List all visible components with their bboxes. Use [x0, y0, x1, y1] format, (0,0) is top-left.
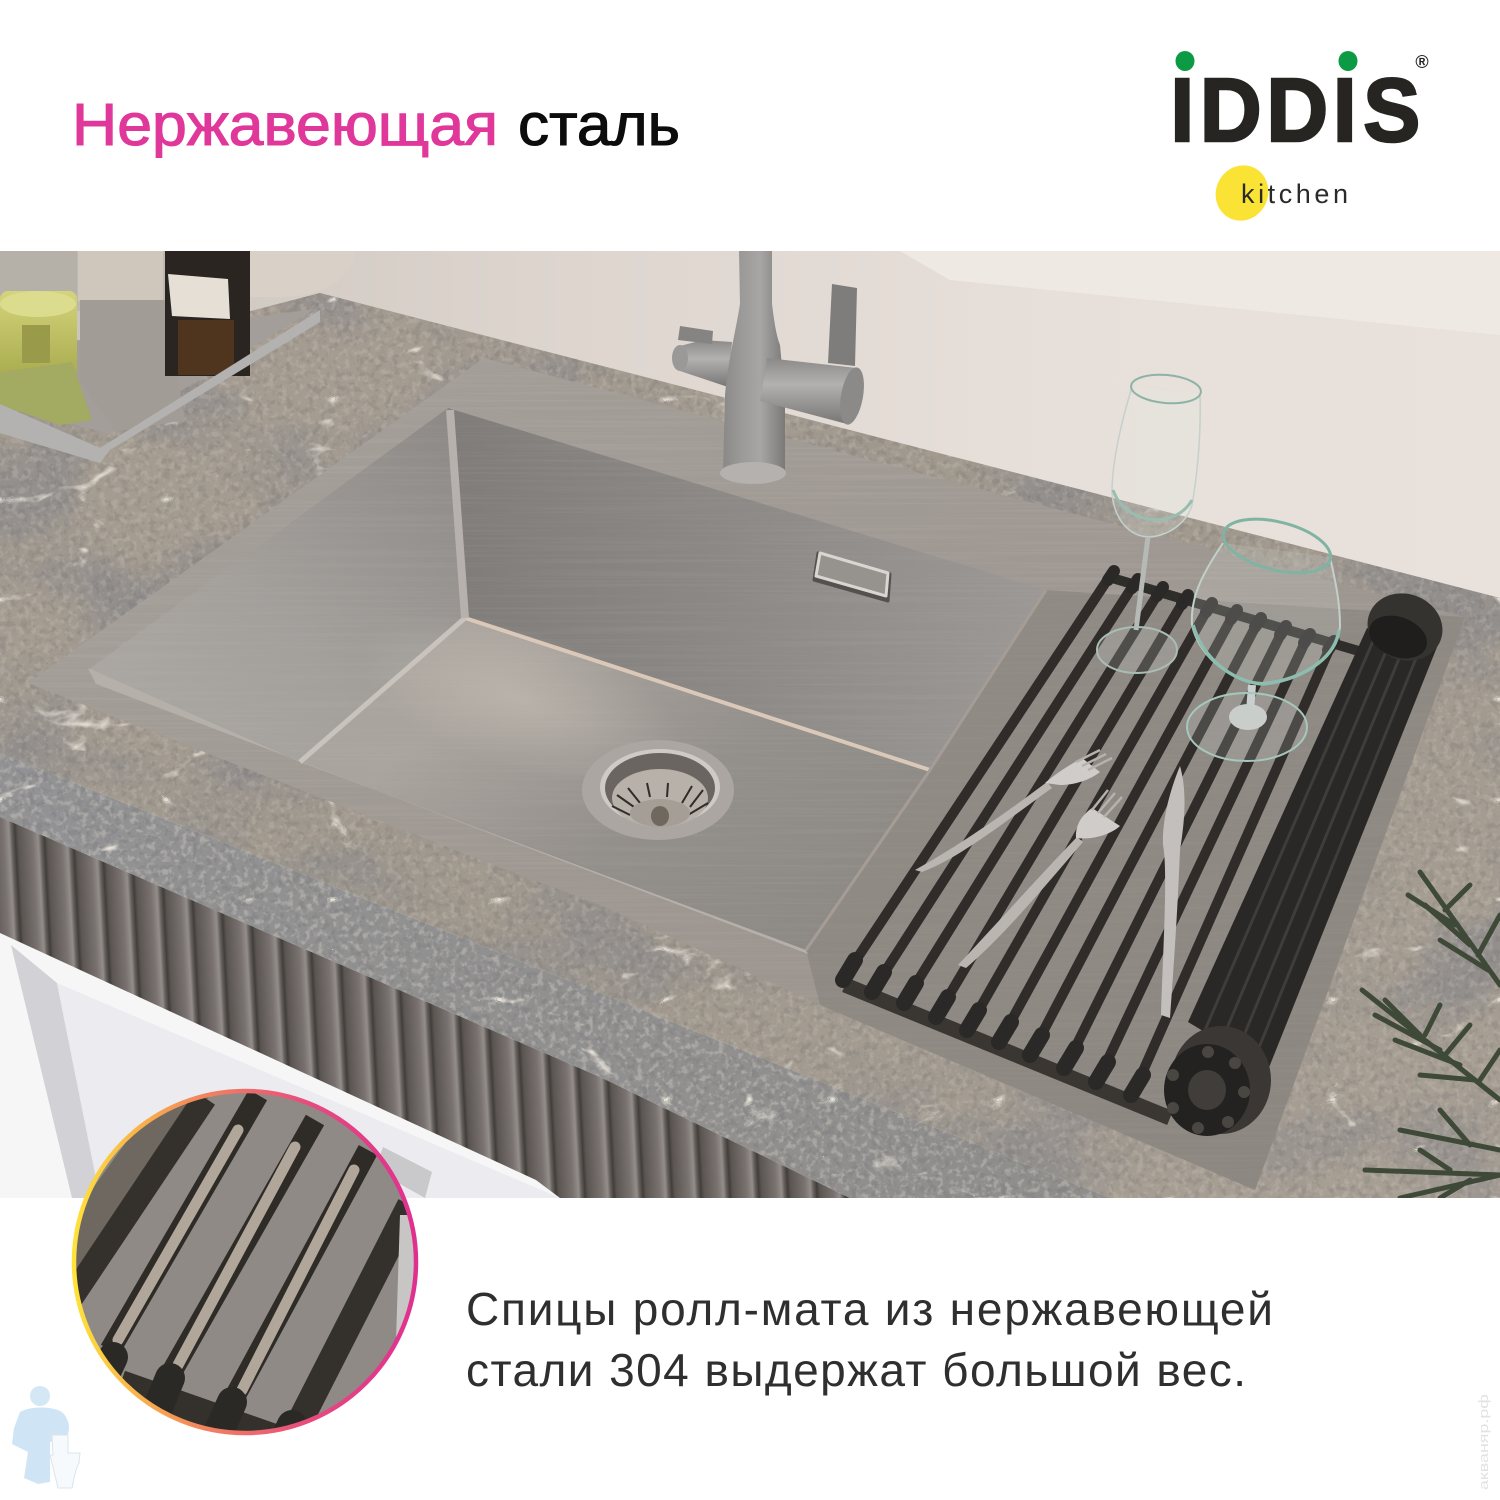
rolled section	[1188, 628, 1439, 1070]
caption text	[466, 1283, 1273, 1396]
right dark rod	[298, 1205, 410, 1425]
roll top end cap	[1358, 583, 1452, 671]
mat front bar	[845, 985, 1170, 1118]
wine bottle	[165, 251, 250, 376]
fork 2	[958, 790, 1122, 968]
bowl back wall	[448, 408, 1046, 770]
bowl front lip	[88, 668, 808, 954]
cabinet	[0, 920, 580, 1198]
caption text: стали 304 выдержат большой вес.	[466, 1344, 1246, 1396]
lever	[828, 284, 857, 366]
olive oil jar	[0, 251, 92, 425]
right handle	[760, 358, 857, 424]
faucet	[672, 251, 868, 484]
roll bottom end cap	[1164, 1026, 1271, 1136]
wall light band	[900, 251, 1500, 335]
title: Нержавеющая	[72, 92, 498, 158]
gradient ring	[74, 1091, 416, 1433]
roll mat	[843, 571, 1452, 1136]
fluted front	[0, 817, 850, 1198]
mat top caps	[1108, 571, 1334, 650]
mat rod bars	[110, 1095, 368, 1400]
mat rod caps	[843, 960, 1143, 1095]
caption text: Спицы ролл-мата из нержавеющей	[466, 1283, 1273, 1335]
detail photo content	[60, 1088, 420, 1455]
website watermark: акваняр.рф	[1476, 1394, 1491, 1490]
cutlery	[915, 750, 1185, 1018]
icon: plumber with toilet watermark	[12, 1386, 80, 1488]
drain	[582, 740, 734, 840]
tray front rim	[0, 310, 320, 463]
tray interior	[0, 309, 315, 434]
logo sub-brand: kitchen	[1241, 179, 1348, 209]
logo: IDDIS kitchen	[1170, 51, 1429, 229]
back objects	[0, 251, 165, 311]
balloon glass, standing on mat	[1187, 509, 1340, 761]
callout: zoomed detail of mat rods	[60, 1088, 420, 1455]
wall	[77, 251, 1500, 598]
logo dots	[1176, 51, 1358, 71]
countertop front edge	[0, 753, 1110, 1198]
registered mark: ®	[1415, 52, 1429, 72]
bowl left wall	[88, 408, 465, 762]
plate brushed right section	[806, 590, 1465, 1190]
overflow cover	[814, 553, 890, 601]
title: сталь	[518, 92, 680, 158]
sink bowl	[88, 408, 1046, 954]
clear jar	[78, 251, 185, 432]
faucet body	[723, 251, 785, 473]
logo accent: yellow circle	[1207, 157, 1277, 229]
logo wordmark: IDDIS	[1170, 60, 1420, 160]
left handle	[680, 340, 732, 387]
title	[72, 92, 680, 158]
countertop	[0, 293, 1500, 1198]
wine glass, standing on mat	[1097, 372, 1202, 673]
rod tips	[100, 1357, 292, 1450]
steel rod highlights	[118, 1130, 354, 1390]
knife	[1161, 766, 1185, 1018]
pale plate behind	[250, 251, 355, 297]
fork 1	[915, 750, 1112, 872]
mat rods	[848, 573, 1332, 1087]
front bar	[120, 1385, 320, 1455]
rosemary sprig	[1362, 872, 1500, 1198]
photo: kitchen sink	[0, 251, 1500, 1198]
bottles and glass tray	[0, 251, 355, 463]
mat back bar	[1112, 578, 1362, 652]
sink plate	[28, 358, 1465, 1190]
bowl floor	[300, 618, 930, 952]
